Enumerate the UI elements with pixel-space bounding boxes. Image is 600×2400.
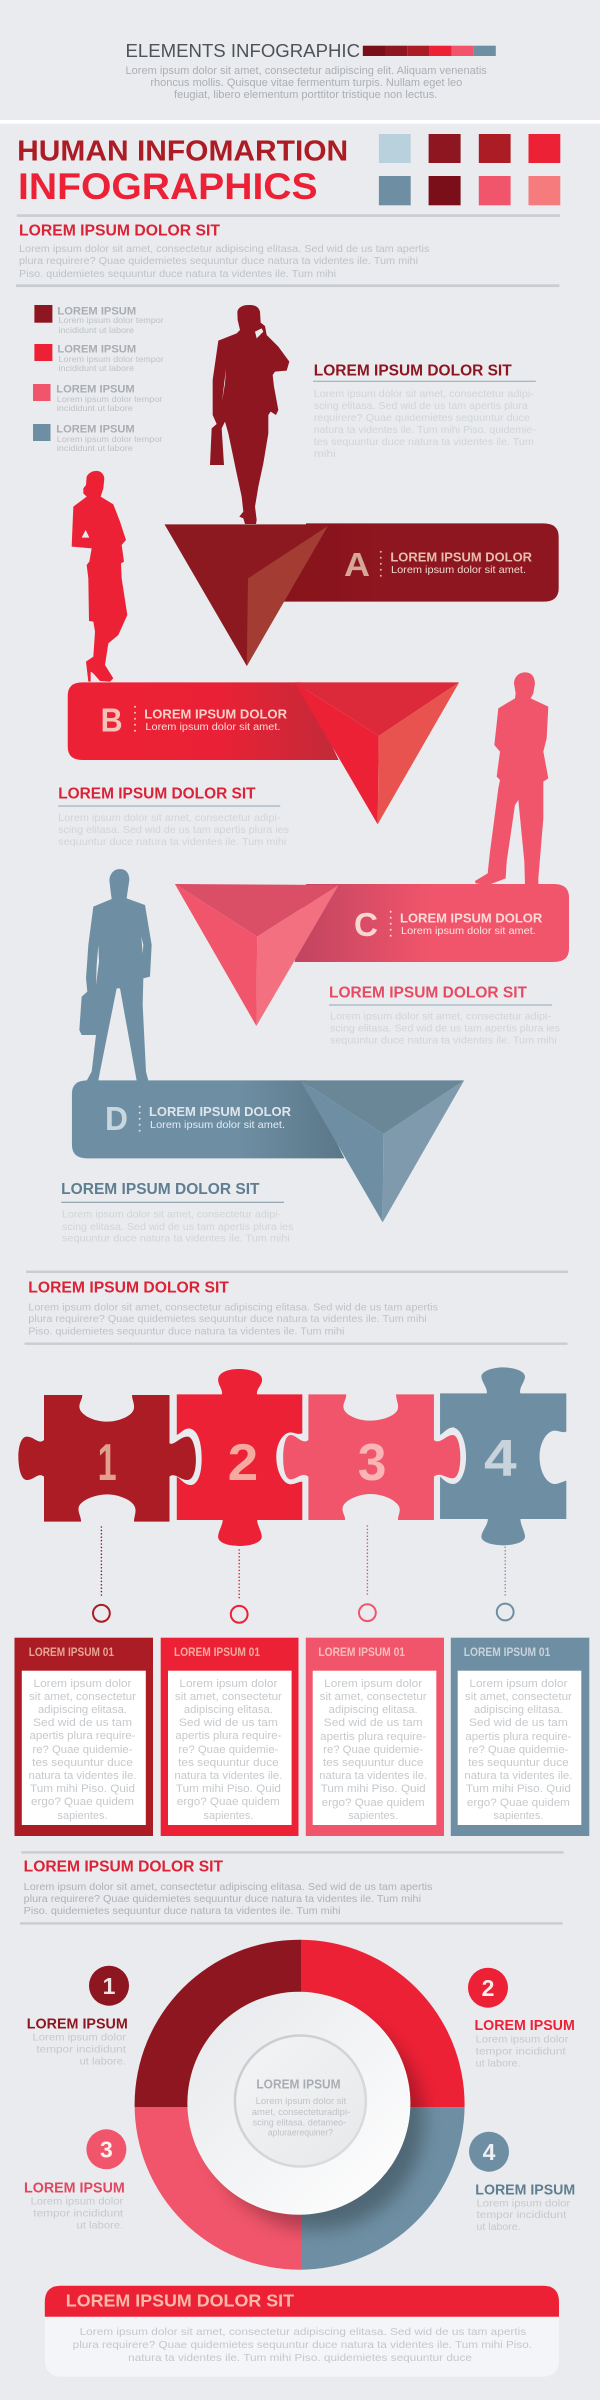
card 4: natura ta videntes ile.	[464, 1770, 572, 1782]
card 4: tes sequuntur duce	[468, 1757, 569, 1769]
card 3: Lorem ipsum dolor	[324, 1678, 423, 1690]
text block A: tes sequuntur duce natura ta videntes ile. Tum	[314, 436, 534, 448]
puzzle intro text	[28, 1279, 438, 1338]
text block A: natura ta videntes ile. Tum mihi Piso. quidemie-	[314, 424, 536, 436]
card 1: apertis plura require-	[30, 1730, 136, 1742]
legend item 1: incididunt ut labore	[58, 325, 134, 335]
text block A: requirere? Quae quidemietes sequuntur duce	[314, 412, 530, 424]
callout 4: ut labore.	[476, 2221, 520, 2233]
card 1	[14, 1638, 153, 1836]
card 3: LOREM IPSUM 01	[318, 1647, 406, 1659]
text block D: Lorem ipsum dolor sit amet, consectetur adipi-	[62, 1208, 282, 1220]
donut chart	[130, 1935, 471, 2277]
letter D: D	[105, 1100, 128, 1137]
text block B: sequuntur duce natura ta videntes ile. Tum mihi	[58, 836, 286, 848]
callout 3: 3	[100, 2137, 113, 2163]
connector 1	[93, 1527, 110, 1622]
text block A: LOREM IPSUM DOLOR SIT	[314, 363, 512, 380]
legend item 2: LOREM IPSUM	[57, 343, 136, 355]
card 3: sit amet, consectetur	[320, 1691, 427, 1703]
main title	[17, 136, 348, 207]
legend item 2: incididunt ut labore	[58, 363, 134, 373]
puzzle intro text: plura requirere? Quae quidemietes sequuntur duce natura ta videntes ile. Tum mihi	[28, 1313, 427, 1325]
donut centre text	[252, 2076, 350, 2138]
puzzle piece 1	[18, 1395, 196, 1522]
main title: HUMAN INFOMARTION	[17, 136, 348, 168]
legend item 4: incididunt ut labore	[57, 443, 133, 453]
card 1: natura ta videntes ile.	[28, 1770, 136, 1782]
colour swatches	[379, 134, 560, 205]
panel B: band and triangle: Lorem ipsum dolor sit amet.	[145, 721, 280, 733]
card 4: LOREM IPSUM 01	[464, 1647, 551, 1659]
white divider	[0, 120, 600, 124]
card 4: Sed wid de us tam	[469, 1717, 568, 1729]
text block C: LOREM IPSUM DOLOR SIT	[329, 984, 528, 1001]
callout 1	[27, 1966, 129, 2068]
callout 2: LOREM IPSUM	[474, 2017, 575, 2034]
callout 1: 1	[103, 1973, 116, 1999]
legend item 4: Lorem ipsum dolor tempor	[57, 434, 162, 444]
legend item 1: LOREM IPSUM	[57, 305, 136, 317]
puzzle intro text: LOREM IPSUM DOLOR SIT	[28, 1279, 229, 1296]
legend item 2	[34, 343, 164, 373]
footer panel	[45, 2286, 559, 2377]
callout 2: tempor incididunt	[476, 2046, 566, 2058]
main title: INFOGRAPHICS	[18, 166, 318, 207]
panel B: band and triangle	[68, 682, 459, 824]
puzzle piece 4: 4	[484, 1430, 517, 1488]
card 4: adipiscing elitasa.	[474, 1704, 563, 1716]
panel C: band and triangle: LOREM IPSUM DOLOR	[400, 911, 543, 926]
legend item 4	[33, 423, 162, 453]
legend item 1: Lorem ipsum dolor tempor	[58, 315, 164, 325]
footer panel: LOREM IPSUM DOLOR SIT	[66, 2291, 294, 2311]
band C	[295, 884, 569, 962]
donut centre text: LOREM IPSUM	[256, 2076, 341, 2091]
card 3: Tum mihi Piso. Quid	[321, 1783, 426, 1795]
letter C: C	[354, 906, 378, 943]
card 4: Lorem ipsum dolor	[469, 1678, 568, 1690]
footer panel: plura requirere? Quae quidemietes sequuntur duce natura ta videntes ile. Tum mihi Piso.	[73, 2339, 532, 2351]
puzzle piece 3: 3	[358, 1434, 386, 1492]
callout 4: Lorem ipsum dolor	[476, 2198, 571, 2210]
intro text block: Piso. quidemietes sequuntur duce natura ta videntes ile. Tum mihi	[19, 268, 336, 280]
card 2: adipiscing elitasa.	[184, 1704, 273, 1716]
card 2: apertis plura require-	[175, 1730, 282, 1742]
triangle C	[175, 884, 339, 1026]
card 2: tes sequuntur duce	[178, 1757, 279, 1769]
legend item 1	[34, 305, 164, 335]
figure: man with briefcase	[79, 869, 152, 1081]
callout 3	[24, 2129, 126, 2232]
text block B: LOREM IPSUM DOLOR SIT	[58, 785, 256, 802]
legend item 2: Lorem ipsum dolor tempor	[58, 354, 164, 364]
legend item 3: incididunt ut labore	[57, 403, 133, 413]
figure: woman	[72, 471, 127, 682]
header description: feugiat, libero elementum porttitor tristique non lectus.	[174, 89, 437, 101]
text block A: scing elitasa. Sed wid de us tam apertis plura	[314, 400, 528, 412]
letter A: A	[344, 546, 370, 583]
card 1: Tum mihi Piso. Quid	[30, 1783, 135, 1795]
card 3: tes sequuntur duce	[323, 1757, 424, 1769]
callout 1: Lorem ipsum dolor	[32, 2032, 127, 2044]
card 1: LOREM IPSUM 01	[29, 1647, 115, 1659]
header title: ELEMENTS INFOGRAPHIC	[126, 40, 360, 61]
puzzle piece 1: 1	[98, 1434, 117, 1492]
connector 3	[359, 1526, 376, 1621]
text block A: Lorem ipsum dolor sit amet, consectetur adipi-	[314, 388, 534, 400]
triangle A	[165, 524, 328, 666]
puzzle intro text: Lorem ipsum dolor sit amet, consectetur adipiscing elitasa. Sed wid de us tam apertis	[28, 1302, 438, 1314]
card 1: Lorem ipsum dolor	[34, 1678, 132, 1690]
card 3: sapientes.	[348, 1810, 398, 1822]
callout 3: Lorem ipsum dolor	[31, 2196, 124, 2208]
text block D: scing elitasa. Sed wid de us tam apertis plura ies	[62, 1221, 294, 1233]
puzzle piece 3	[283, 1394, 460, 1520]
donut segments	[130, 1935, 471, 2277]
callout 2: Lorem ipsum dolor	[476, 2034, 569, 2046]
donut centre text: Lorem ipsum dolor sit	[256, 2096, 347, 2106]
figure: man on the phone	[210, 305, 289, 524]
section text above donut: plura requirere? Quae quidemietes sequuntur duce natura ta videntes ile. Tum mihi	[24, 1893, 421, 1905]
letter B: B	[101, 702, 123, 739]
card 2: Tum mihi Piso. Quid	[176, 1783, 281, 1795]
card 2: sit amet, consectetur	[175, 1691, 282, 1703]
callout 4: tempor incididunt	[476, 2209, 566, 2221]
triangle B	[295, 682, 459, 824]
card 2: LOREM IPSUM 01	[174, 1647, 261, 1659]
text block A: mihi	[314, 448, 336, 460]
card 4: apertis plura require-	[465, 1731, 572, 1743]
card 2	[161, 1638, 298, 1836]
text block C: sequuntur duce natura ta videntes ile. Tum mihi	[330, 1034, 557, 1046]
intro text block: LOREM IPSUM DOLOR SIT	[19, 222, 221, 240]
card 2: re? Quae quidemie-	[178, 1744, 279, 1756]
panel C: band and triangle: Lorem ipsum dolor sit amet.	[401, 925, 536, 937]
text block C: scing elitasa. Sed wid de us tam apertis plura ies	[330, 1022, 560, 1034]
triangle D	[300, 1080, 464, 1222]
callout 4: LOREM IPSUM	[475, 2181, 575, 2198]
footer panel: natura ta videntes ile. Tum mihi Piso. quidemietes sequuntur duce	[128, 2352, 472, 2364]
panel A: band and triangle: LOREM IPSUM DOLOR	[390, 549, 533, 564]
puzzle piece 2: 2	[228, 1434, 258, 1492]
card 1: sit amet, consectetur	[29, 1691, 136, 1703]
callout 4	[469, 2132, 575, 2233]
card 3: Sed wid de us tam	[324, 1717, 423, 1729]
text block D: sequuntur duce natura ta videntes ile. Tum mihi	[62, 1233, 290, 1245]
band B	[68, 682, 339, 760]
panel C: band and triangle	[175, 884, 569, 1026]
callout 3: tempor incididunt	[33, 2208, 123, 2220]
card 4: sit amet, consectetur	[465, 1691, 572, 1703]
callout 1: LOREM IPSUM	[27, 2015, 128, 2032]
puzzle piece 4	[440, 1367, 566, 1545]
header block	[126, 40, 496, 101]
card 2: sapientes.	[203, 1810, 253, 1822]
card 3: natura ta videntes ile.	[319, 1770, 427, 1782]
text block D	[61, 1181, 294, 1245]
connector 2	[231, 1550, 248, 1623]
card 4: Tum mihi Piso. Quid	[466, 1783, 571, 1795]
figure: standing man	[475, 672, 548, 886]
card 2: Sed wid de us tam	[179, 1717, 278, 1729]
intro text block: plura requirere? Quae quidemietes sequuntur duce natura ta videntes ile. Tum mihi	[19, 255, 418, 267]
intro text block	[19, 222, 429, 280]
intro text block: Lorem ipsum dolor sit amet, consectetur adipiscing elitasa. Sed wid de us tam apertis	[19, 243, 429, 255]
callout 2: ut labore.	[476, 2058, 520, 2070]
text block C	[329, 984, 560, 1046]
card 4	[451, 1638, 589, 1836]
donut centre disc	[187, 1992, 410, 2215]
card 2: natura ta videntes ile.	[174, 1770, 282, 1782]
panel A: band and triangle: Lorem ipsum dolor sit amet.	[391, 564, 526, 576]
card 2: Lorem ipsum dolor	[179, 1678, 278, 1690]
connector 4	[497, 1547, 514, 1620]
legend item 3: Lorem ipsum dolor tempor	[57, 394, 162, 404]
legend item 3: LOREM IPSUM	[56, 383, 135, 395]
card 1: tes sequuntur duce	[32, 1757, 133, 1769]
card 1: re? Quae quidemie-	[32, 1744, 133, 1756]
card 4: re? Quae quidemie-	[468, 1744, 569, 1756]
section text above donut	[24, 1859, 433, 1917]
callout 2: 2	[482, 1975, 494, 2001]
callout 3: ut labore.	[76, 2220, 123, 2232]
panel D: band and triangle: Lorem ipsum dolor sit amet.	[150, 1119, 285, 1131]
panel A: band and triangle	[165, 523, 559, 666]
panel D: band and triangle	[72, 1080, 464, 1222]
card 1: ergo? Quae quidem	[31, 1796, 134, 1808]
section text above donut: LOREM IPSUM DOLOR SIT	[24, 1859, 224, 1876]
callout 1: ut labore.	[80, 2056, 126, 2068]
header description: rhoncus mollis. Quisque vitae fermentum turpis. Nullam eget leo	[150, 77, 462, 89]
header colour strip	[363, 46, 496, 56]
panel D: band and triangle: LOREM IPSUM DOLOR	[149, 1104, 292, 1119]
card 3: apertis plura require-	[320, 1731, 427, 1743]
text block B: Lorem ipsum dolor sit amet, consectetur adipi-	[58, 812, 281, 824]
section text above donut: Piso. quidemietes sequuntur duce natura ta videntes ile. Tum mihi	[24, 1905, 341, 1917]
callout 2	[468, 1968, 575, 2070]
callout 1: tempor incididunt	[36, 2044, 126, 2056]
callout 4: 4	[483, 2139, 496, 2165]
donut centre text: apluraerequiner?	[268, 2128, 333, 2138]
panel B: band and triangle: LOREM IPSUM DOLOR	[144, 706, 288, 721]
donut centre text: scing elitasa. detameo-	[253, 2117, 346, 2127]
text block C: Lorem ipsum dolor sit amet, consectetur adipi-	[330, 1010, 552, 1022]
card 1: sapientes.	[58, 1810, 108, 1822]
card 4: sapientes.	[493, 1810, 543, 1822]
footer panel: Lorem ipsum dolor sit amet, consectetur adipiscing elitasa. Sed wid de us tam apertis	[80, 2326, 526, 2338]
donut inner circle	[235, 2036, 366, 2166]
card 3: ergo? Quae quidem	[322, 1797, 425, 1809]
card 2: ergo? Quae quidem	[177, 1796, 280, 1808]
legend	[33, 305, 164, 453]
header description: Lorem ipsum dolor sit amet, consectetur adipiscing elit. Aliquam venenatis	[126, 65, 487, 77]
donut centre text: amet, consecteturadipi-	[252, 2107, 350, 2117]
text block B	[58, 785, 289, 848]
header description	[126, 65, 487, 101]
card 3	[306, 1638, 444, 1836]
band A	[283, 523, 559, 602]
text block D: LOREM IPSUM DOLOR SIT	[61, 1181, 260, 1198]
puzzle piece 2	[177, 1369, 302, 1546]
section text above donut: Lorem ipsum dolor sit amet, consectetur adipiscing elitasa. Sed wid de us tam apertis	[24, 1881, 433, 1893]
text block A	[313, 363, 536, 460]
legend item 3	[33, 383, 162, 413]
card 1: Sed wid de us tam	[33, 1717, 132, 1729]
legend item 4: LOREM IPSUM	[56, 423, 135, 435]
card 3: re? Quae quidemie-	[323, 1744, 424, 1756]
band D	[72, 1080, 344, 1158]
card 1: adipiscing elitasa.	[38, 1704, 127, 1716]
card 4: ergo? Quae quidem	[467, 1797, 570, 1809]
text block B: scing elitasa. Sed wid de us tam apertis plura ies	[58, 824, 289, 836]
puzzle intro text: Piso. quidemietes sequuntur duce natura ta videntes ile. Tum mihi	[28, 1326, 344, 1338]
card 3: adipiscing elitasa.	[329, 1704, 418, 1716]
callout 3: LOREM IPSUM	[24, 2179, 125, 2196]
